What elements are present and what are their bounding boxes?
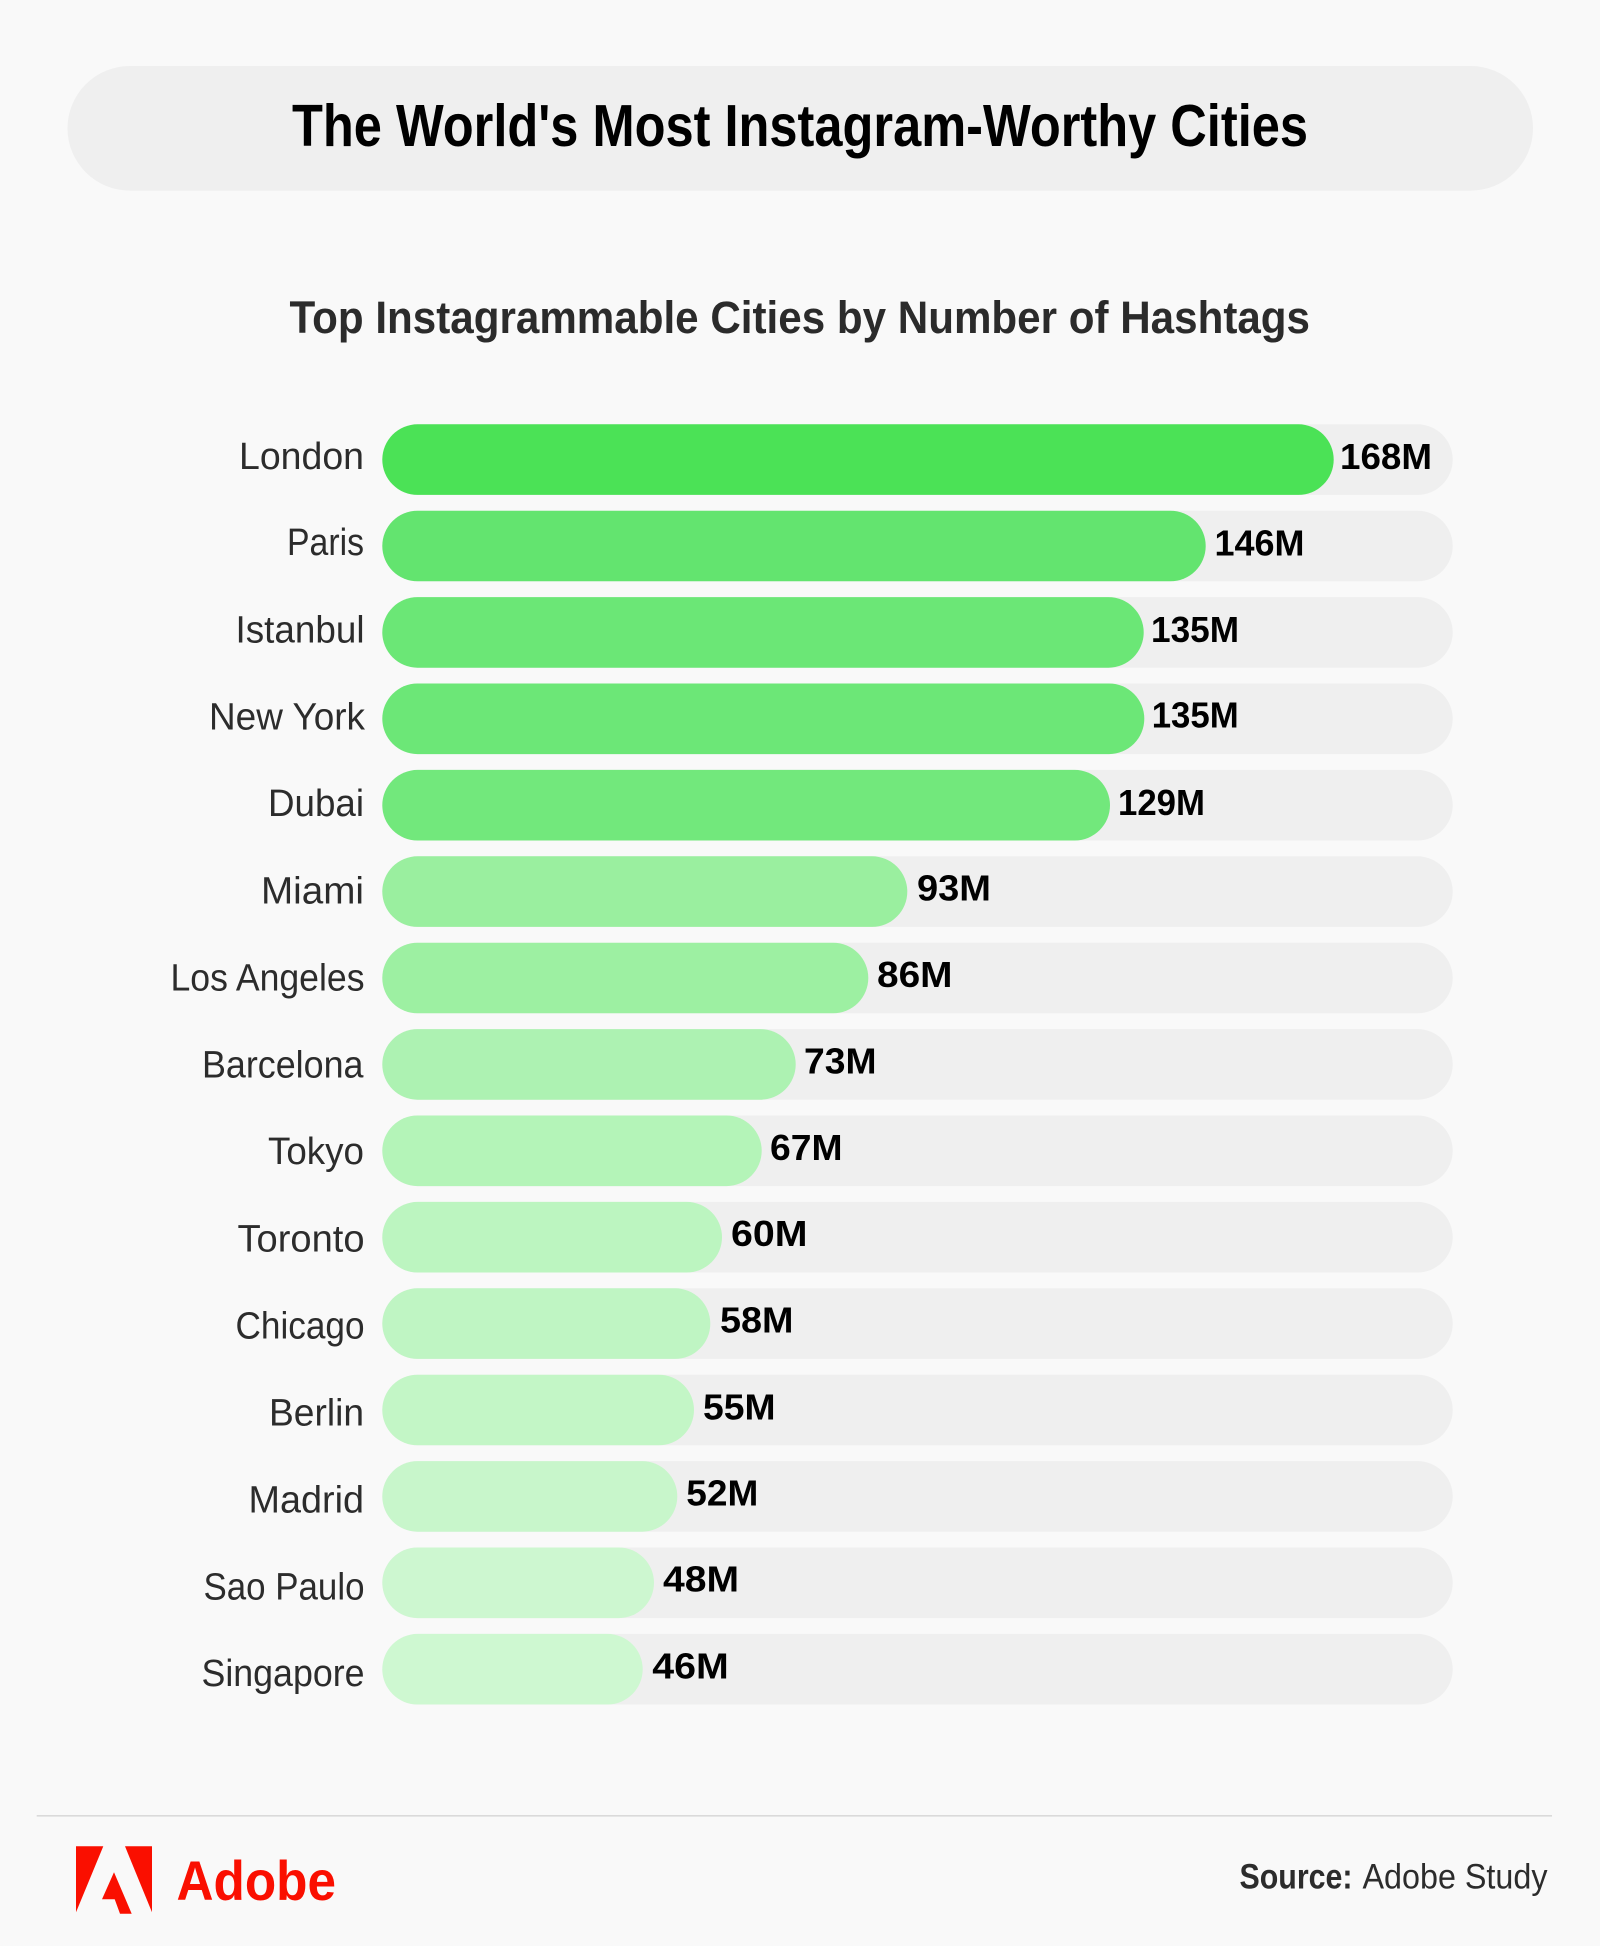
label: Sao Paulo: Sao Paulo bbox=[204, 1566, 364, 1608]
label: Paris: Paris bbox=[287, 522, 364, 564]
value: Barcelona: 73M bbox=[804, 1041, 876, 1082]
label: New York: New York bbox=[209, 696, 366, 738]
label: Los Angeles: Los Angeles bbox=[170, 958, 364, 1000]
bar: Madrid bbox=[382, 1461, 677, 1532]
value: Berlin: 55M bbox=[703, 1387, 776, 1428]
row: Chicago bbox=[236, 1288, 1453, 1359]
row: Miami bbox=[261, 856, 1453, 927]
logo wordmark: Adobe bbox=[176, 1850, 336, 1912]
source note: Source: bbox=[1240, 1857, 1352, 1896]
row: Los Angeles bbox=[170, 943, 1453, 1013]
value: Paris: 146M bbox=[1214, 522, 1304, 563]
row: Barcelona bbox=[202, 1029, 1453, 1100]
bar: Los Angeles bbox=[382, 943, 868, 1013]
bar: Barcelona bbox=[382, 1029, 796, 1100]
chart subtitle: Top Instagrammable Cities by Number of Hashtags bbox=[290, 292, 1310, 343]
label: Chicago: Chicago bbox=[236, 1305, 364, 1347]
value: Sao Paulo: 48M bbox=[663, 1559, 739, 1600]
source note: Adobe Study bbox=[1362, 1857, 1548, 1896]
bar: Dubai bbox=[382, 770, 1110, 840]
value: New York: 135M bbox=[1152, 695, 1239, 736]
row: Tokyo bbox=[268, 1116, 1453, 1186]
value: Tokyo: 67M bbox=[770, 1127, 842, 1168]
row: Toronto bbox=[238, 1202, 1453, 1272]
label: Tokyo: Tokyo bbox=[268, 1131, 364, 1173]
value: Istanbul: 135M bbox=[1151, 609, 1239, 650]
value: Miami: 93M bbox=[917, 868, 991, 909]
row: Madrid bbox=[248, 1461, 1453, 1532]
bar: Miami bbox=[382, 856, 907, 927]
row: Dubai bbox=[268, 770, 1453, 840]
source note bbox=[1240, 1857, 1548, 1896]
row: Berlin bbox=[269, 1375, 1453, 1445]
label: Berlin: Berlin bbox=[269, 1392, 364, 1434]
row: Istanbul bbox=[236, 597, 1453, 668]
bar: Chicago bbox=[382, 1288, 710, 1359]
bar chart bbox=[170, 424, 1453, 1704]
value: Toronto: 60M bbox=[731, 1213, 808, 1254]
value: Los Angeles: 86M bbox=[877, 954, 952, 995]
label: Miami: Miami bbox=[261, 870, 364, 912]
label: Madrid: Madrid bbox=[248, 1479, 364, 1521]
label: Singapore: Singapore bbox=[202, 1653, 364, 1695]
value: Singapore: 46M bbox=[652, 1646, 729, 1686]
bar: London bbox=[382, 424, 1334, 495]
label: London: London bbox=[239, 436, 364, 478]
label: Barcelona: Barcelona bbox=[202, 1044, 364, 1086]
row: London bbox=[239, 424, 1453, 495]
label: Istanbul: Istanbul bbox=[236, 609, 364, 651]
row: Sao Paulo bbox=[204, 1548, 1453, 1618]
bar: Toronto bbox=[382, 1202, 722, 1272]
value: Dubai: 129M bbox=[1118, 782, 1205, 823]
bar: Sao Paulo bbox=[382, 1548, 654, 1618]
bar: Singapore bbox=[382, 1634, 643, 1704]
row: New York bbox=[209, 684, 1453, 754]
label: Toronto: Toronto bbox=[238, 1218, 364, 1260]
row: Paris bbox=[287, 511, 1453, 581]
value: Madrid: 52M bbox=[686, 1473, 758, 1514]
bar: Paris bbox=[382, 511, 1206, 581]
Adobe logo bbox=[76, 1846, 336, 1914]
bar: New York bbox=[382, 684, 1144, 754]
value: London: 168M bbox=[1340, 436, 1432, 477]
label: Dubai: Dubai bbox=[268, 783, 364, 825]
value: Chicago: 58M bbox=[720, 1300, 794, 1341]
row: Singapore bbox=[202, 1634, 1453, 1704]
title banner bbox=[68, 66, 1533, 191]
title: The World's Most Instagram-Worthy Cities bbox=[292, 92, 1308, 159]
bar: Berlin bbox=[382, 1375, 694, 1445]
icon: Adobe mark bbox=[76, 1846, 152, 1914]
bar: Istanbul bbox=[382, 597, 1144, 668]
bar: Tokyo bbox=[382, 1116, 762, 1186]
